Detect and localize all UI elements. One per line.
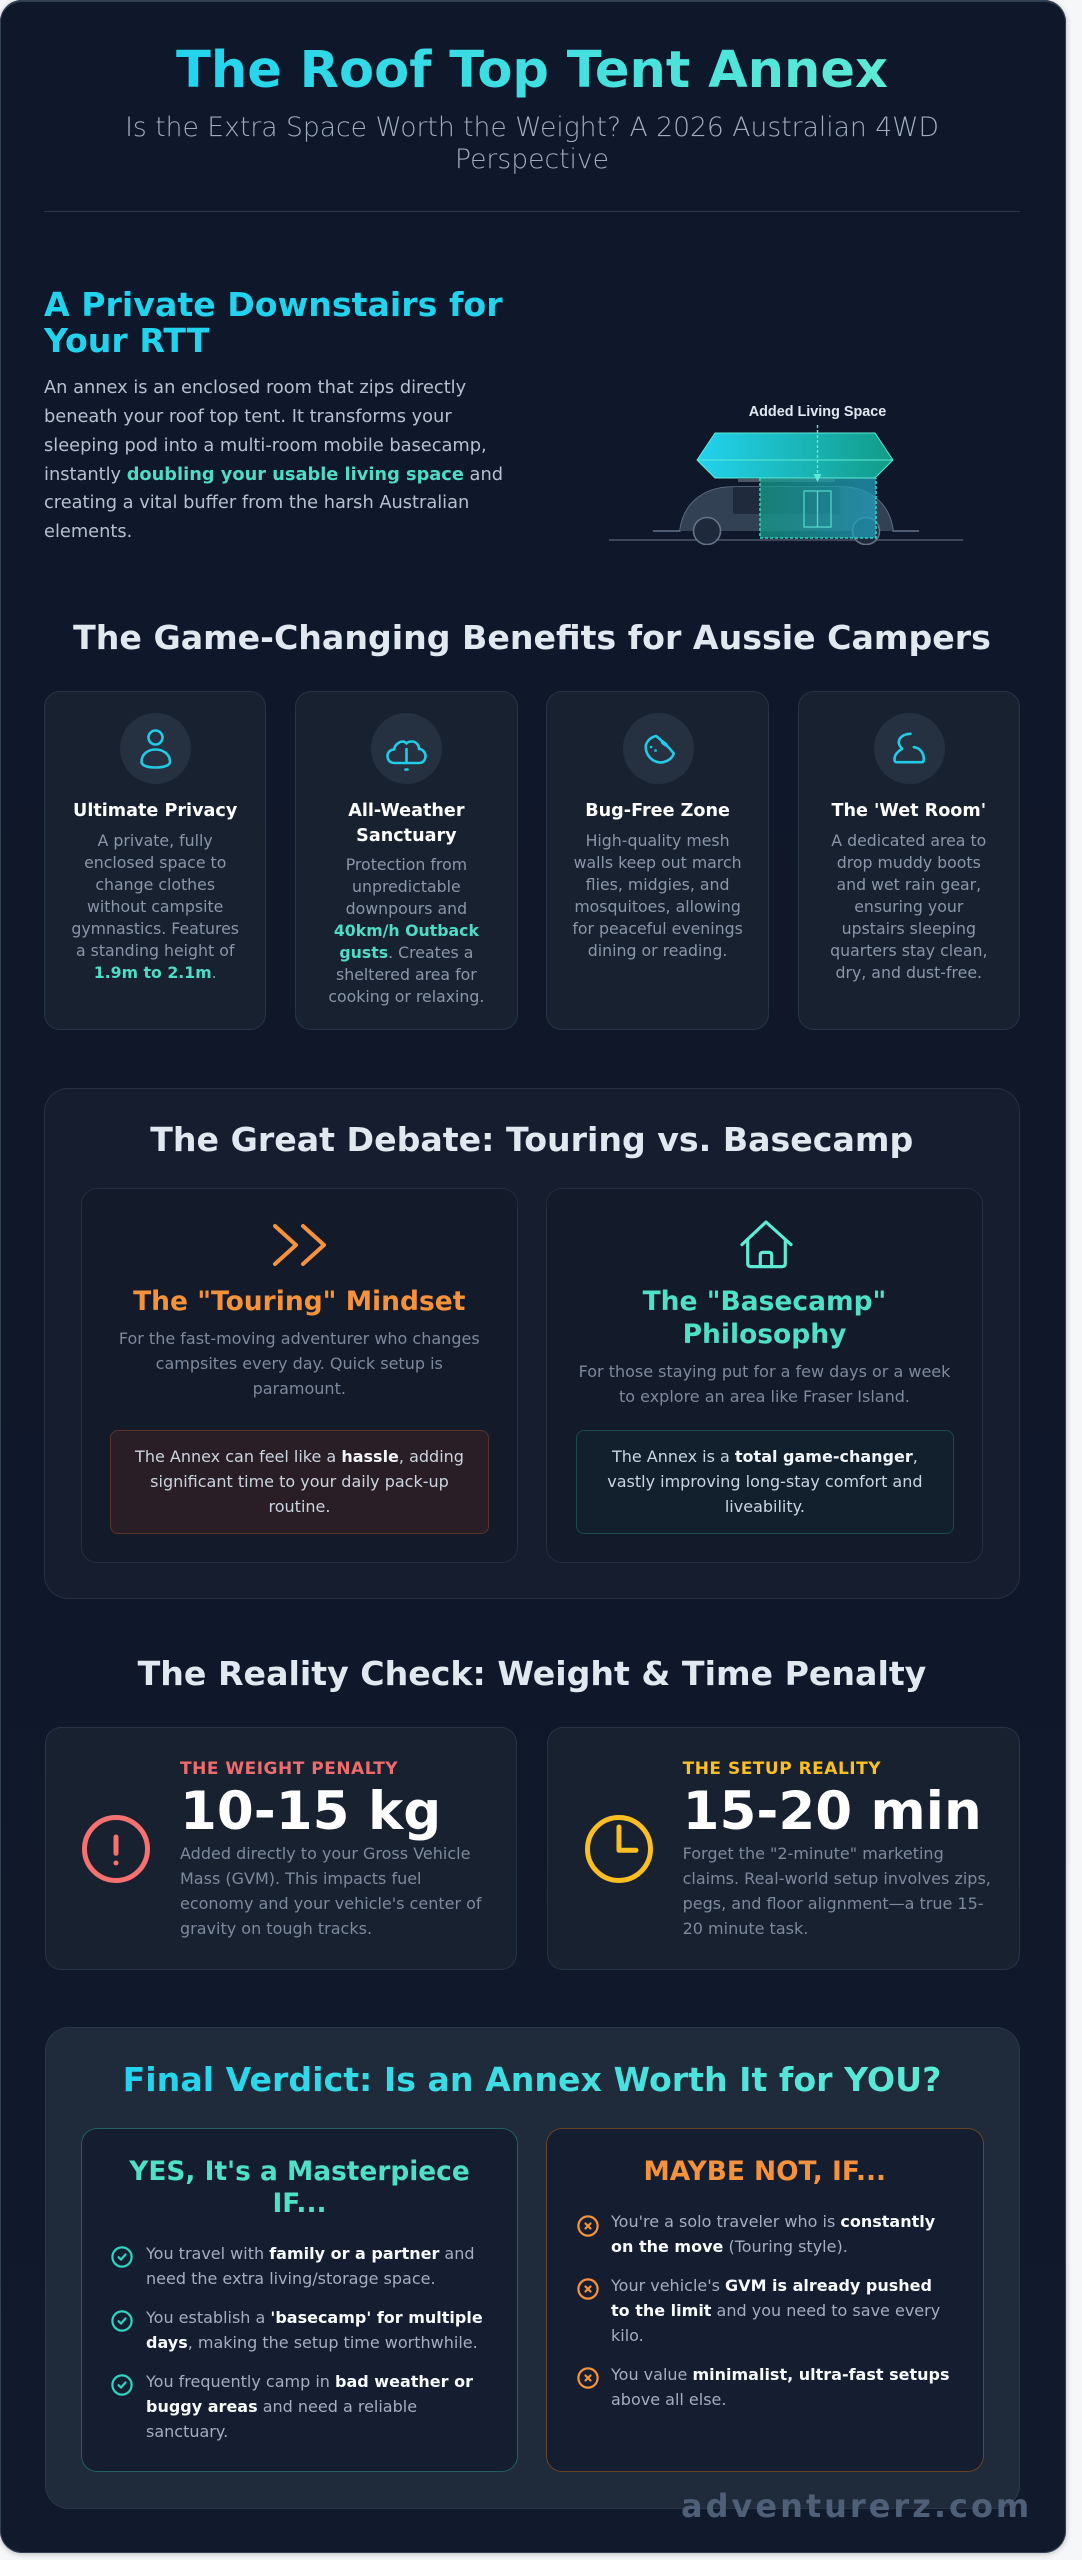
icon: cross <box>577 2215 599 2237</box>
callout: game-changer <box>576 1430 954 1534</box>
section heading: a private downstairs: A Private Downstairs for <box>44 284 503 324</box>
touring text <box>119 1329 480 1398</box>
panel: final verdict <box>44 2027 1020 2509</box>
intro text block: An annex is an enclosed room that zips directly <box>44 377 466 398</box>
yes item 1: need the extra living/storage space. <box>146 2269 436 2288</box>
yes item 1: You travel with family or a partner and <box>146 2244 475 2263</box>
card text: sheltered area for <box>336 965 477 984</box>
card text: without campsite <box>87 897 223 916</box>
basecamp text: to explore an area like Fraser Island. <box>619 1387 910 1406</box>
icon: boot <box>874 712 945 784</box>
panel: ultimate privacy <box>44 691 266 1030</box>
icon: bug <box>623 712 694 784</box>
card text: dining or reading. <box>588 941 727 960</box>
illustration: vehicle with roof top tent and annex: Added Living Space <box>749 404 886 420</box>
card text: drop muddy boots <box>837 853 981 872</box>
card text: upstairs sleeping <box>842 919 976 938</box>
callout: game-changer: The Annex is a total game-changer, <box>612 1447 918 1466</box>
basecamp text <box>579 1362 950 1406</box>
card text: a standing height of <box>76 941 234 960</box>
heading: final verdict: Final Verdict: Is an Annex Worth It for YOU? <box>123 2060 941 2099</box>
icon: cross <box>577 2278 599 2300</box>
card text: walls keep out march <box>574 853 742 872</box>
weight label: THE WEIGHT PENALTY <box>180 1759 398 1779</box>
touring text: For the fast-moving adventurer who changes <box>119 1329 480 1348</box>
callout: hassle: significant time to your daily pack-up <box>150 1472 449 1491</box>
callout: hassle: routine. <box>269 1497 330 1516</box>
section heading: a private downstairs <box>44 284 503 360</box>
yes item 1 <box>146 2244 475 2288</box>
card text <box>71 831 239 982</box>
icon: cross <box>577 2367 599 2389</box>
no item 2: Your vehicle's GVM is already pushed <box>611 2276 932 2295</box>
card text: gusts. Creates a <box>339 943 473 962</box>
callout: hassle: The Annex can feel like a hassle, adding <box>135 1447 464 1466</box>
weight value: 10-15 kg <box>180 1781 441 1842</box>
no item 3 <box>611 2365 949 2409</box>
basecamp heading: Philosophy <box>683 1319 846 1350</box>
intro text block: sleeping pod into a multi-room mobile basecamp, <box>44 435 487 456</box>
no item 2 <box>611 2276 940 2345</box>
basecamp heading <box>642 1286 886 1350</box>
card text: ensuring your <box>854 897 963 916</box>
basecamp heading: The "Basecamp" <box>643 1286 886 1317</box>
card text: cooking or relaxing. <box>328 987 484 1006</box>
card text: quarters stay clean, <box>830 941 987 960</box>
yes item 2: You establish a 'basecamp' for multiple <box>146 2308 483 2327</box>
weight text: gravity on tough tracks. <box>180 1919 372 1938</box>
weight text: economy and your vehicle's center of <box>180 1894 482 1913</box>
card heading: The 'Wet Room' <box>831 801 986 821</box>
weight text: Mass (GVM). This impacts fuel <box>180 1869 422 1888</box>
setup value: 15-20 min <box>683 1781 982 1842</box>
setup text: Forget the "2-minute" marketing <box>683 1844 944 1863</box>
no item 1: You're a solo traveler who is constantly <box>611 2212 935 2231</box>
card text: dry, and dust-free. <box>836 963 982 982</box>
card heading <box>348 801 465 846</box>
card text: gymnastics. Features <box>71 919 239 938</box>
panel: wet room <box>798 691 1020 1030</box>
card heading: All-Weather <box>348 801 465 821</box>
card text <box>572 831 743 960</box>
basecamp text: For those staying put for a few days or a week <box>579 1362 950 1381</box>
setup text <box>683 1844 991 1938</box>
card text: 40km/h Outback <box>334 921 479 940</box>
icon: cloud <box>371 712 442 784</box>
illustration: vehicle with roof top tent and annex <box>609 404 963 545</box>
panel: setup reality <box>547 1727 1020 1970</box>
yes item 2: days, making the setup time worthwhile. <box>146 2333 478 2352</box>
card text: for peaceful evenings <box>572 919 743 938</box>
yes heading: IF... <box>272 2188 327 2219</box>
card text: downpours and <box>346 899 467 918</box>
no item 2: kilo. <box>611 2326 644 2345</box>
touring heading: The "Touring" Mindset <box>133 1286 465 1317</box>
card text: A private, fully <box>98 831 213 850</box>
heading: benefits: The Game-Changing Benefits for Aussie Campers <box>73 618 991 656</box>
icon: check <box>111 2246 133 2268</box>
card text <box>830 831 987 982</box>
panel: touring mindset <box>81 1188 518 1563</box>
card text: Protection from <box>346 855 467 874</box>
card heading: Bug-Free Zone <box>585 801 730 821</box>
intro text block: beneath your roof top tent. It transforms your <box>44 406 452 427</box>
card heading: Sanctuary <box>356 826 457 846</box>
panel: maybe not <box>546 2128 984 2472</box>
heading: reality check: The Reality Check: Weight & Time Penalty <box>138 1654 926 1693</box>
panel: the great debate <box>44 1088 1020 1599</box>
panel: bug-free zone <box>546 691 769 1030</box>
icon: clock <box>585 1815 653 1883</box>
yes heading: YES, It's a Masterpiece <box>129 2156 470 2187</box>
card text: change clothes <box>95 875 215 894</box>
setup text: claims. Real-world setup involves zips, <box>683 1869 991 1888</box>
card text: A dedicated area to <box>831 831 986 850</box>
setup label: THE SETUP REALITY <box>683 1759 881 1779</box>
icon: check <box>111 2310 133 2332</box>
maybe not heading: MAYBE NOT, IF... <box>643 2156 886 2187</box>
intro text block: elements. <box>44 521 132 542</box>
no item 3: You value minimalist, ultra-fast setups <box>611 2365 949 2384</box>
touring text: campsites every day. Quick setup is <box>156 1354 443 1373</box>
touring text: paramount. <box>253 1379 346 1398</box>
subtitle: Perspective <box>455 144 609 174</box>
heading: great debate: The Great Debate: Touring vs. Basecamp <box>150 1120 913 1159</box>
weight text <box>180 1844 482 1938</box>
intro text block <box>44 377 503 542</box>
yes item 3: You frequently camp in bad weather or <box>146 2372 473 2391</box>
icon: warning circle <box>82 1815 150 1883</box>
icon: house <box>740 1220 793 1268</box>
card text: and wet rain gear, <box>836 875 981 894</box>
card text: High-quality mesh <box>586 831 730 850</box>
card text: flies, midgies, and <box>586 875 730 894</box>
icon: person <box>120 712 191 784</box>
icon: check <box>111 2374 133 2396</box>
setup text: pegs, and floor alignment—a true 15- <box>683 1894 984 1913</box>
yes item 3 <box>146 2372 473 2441</box>
card text: mosquitoes, allowing <box>574 897 741 916</box>
no item 3: above all else. <box>611 2390 726 2409</box>
watermark: adventurerz.com <box>681 2487 1032 2525</box>
yes heading <box>129 2156 470 2219</box>
panel: all-weather sanctuary <box>295 691 518 1030</box>
card text: 1.9m to 2.1m. <box>94 963 217 982</box>
panel: yes <box>81 2128 518 2472</box>
card text: unpredictable <box>352 877 461 896</box>
yes item 3: buggy areas and need a reliable <box>146 2397 417 2416</box>
panel: basecamp philosophy <box>546 1188 983 1563</box>
card heading: Ultimate Privacy <box>73 801 237 821</box>
no item 1: on the move (Touring style). <box>611 2237 848 2256</box>
card text <box>328 855 484 1006</box>
yes item 3: sanctuary. <box>146 2422 228 2441</box>
no item 2: to the limit and you need to save every <box>611 2301 940 2320</box>
panel: weight penalty <box>45 1727 517 1970</box>
intro text block: creating a vital buffer from the harsh Australian <box>44 492 469 513</box>
no item 1 <box>611 2212 935 2256</box>
subtitle <box>125 112 939 174</box>
callout: game-changer: vastly improving long-stay comfort and <box>607 1472 923 1491</box>
section heading: a private downstairs: Your RTT <box>44 320 209 360</box>
icon: double chevron <box>272 1224 326 1266</box>
subtitle: Is the Extra Space Worth the Weight? A 2026 Australian 4WD <box>125 112 939 142</box>
weight text: Added directly to your Gross Vehicle <box>180 1844 470 1863</box>
callout: game-changer: liveability. <box>725 1497 805 1516</box>
intro text block: instantly doubling your usable living space and <box>44 464 503 485</box>
title: The Roof Top Tent Annex <box>176 41 888 100</box>
callout: hassle <box>110 1430 489 1534</box>
setup text: 20 minute task. <box>683 1919 808 1938</box>
yes item 2 <box>146 2308 483 2352</box>
card text: enclosed space to <box>84 853 226 872</box>
